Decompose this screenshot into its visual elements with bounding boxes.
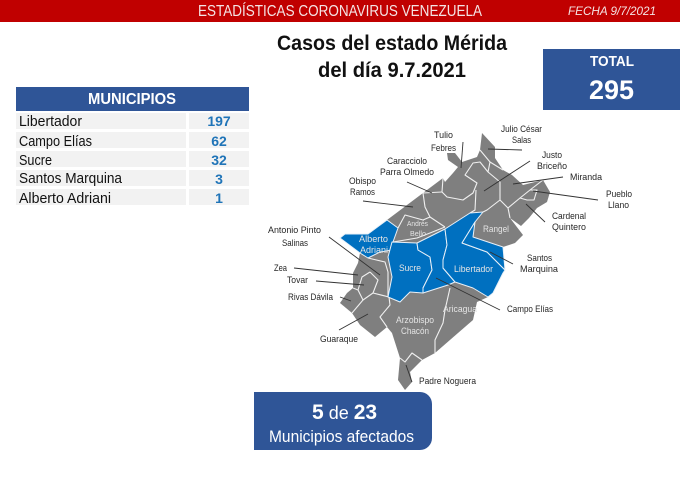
labels inside map: Chacón xyxy=(401,326,429,336)
callout: municipios afectados: 5 de 23 xyxy=(312,401,377,424)
header bar xyxy=(0,0,680,22)
panel: municipios table: 62 xyxy=(211,133,227,149)
labels inside map: Libertador xyxy=(454,264,493,274)
municipality labels: Santos xyxy=(527,253,552,263)
municipality labels: Zea xyxy=(274,263,288,273)
labels inside map: Sucre xyxy=(399,263,421,273)
municipality labels: Llano xyxy=(608,200,629,210)
panel: municipios table: Libertador xyxy=(19,114,82,130)
municipality labels: Obispo xyxy=(349,176,376,186)
municipality labels: Antonio Pinto xyxy=(268,225,321,235)
callout: municipios afectados xyxy=(254,392,432,450)
labels inside map: Bello xyxy=(410,229,426,238)
municipality labels: Miranda xyxy=(570,172,603,182)
labels inside map xyxy=(359,219,509,336)
panel: municipios table xyxy=(16,87,249,207)
municipality boundaries xyxy=(352,150,543,362)
labels inside map: Aricagua xyxy=(443,304,478,314)
header bar: FECHA 9/7/2021 xyxy=(568,4,656,18)
municipality labels: Padre Noguera xyxy=(419,376,477,386)
municipality labels: Ramos xyxy=(350,187,375,197)
municipality labels: Campo Elías xyxy=(507,304,553,314)
map of Mérida xyxy=(268,124,632,390)
callout: municipios afectados: Municipios afectados xyxy=(269,427,414,446)
municipality labels: Febres xyxy=(431,143,456,153)
title xyxy=(277,32,507,82)
total box: TOTAL xyxy=(590,53,634,70)
grey state base xyxy=(340,133,550,390)
labels inside map: Alberto xyxy=(359,234,388,244)
labels inside map: Arzobispo xyxy=(396,315,434,325)
municipality labels: Salinas xyxy=(282,238,308,248)
panel: municipios table: 3 xyxy=(215,171,223,187)
title: del día 9.7.2021 xyxy=(318,59,466,82)
municipality labels: Guaraque xyxy=(320,334,358,344)
panel: municipios table: 1 xyxy=(215,190,223,206)
panel: municipios table: MUNICIPIOS xyxy=(88,91,176,108)
municipality labels xyxy=(268,124,632,386)
municipality labels: Julio César xyxy=(501,124,542,134)
panel: municipios table: Alberto Adriani xyxy=(19,191,111,207)
municipality labels: Quintero xyxy=(552,222,586,232)
municipality labels: Pueblo xyxy=(606,189,632,199)
affected municipalities xyxy=(340,220,398,258)
labels inside map: Andrés xyxy=(407,219,428,228)
total box xyxy=(543,49,680,110)
labels inside map: Adriani xyxy=(360,245,388,255)
municipality labels: Cardenal xyxy=(552,211,586,221)
municipality labels: Parra Olmedo xyxy=(380,167,434,177)
municipality labels: Marquina xyxy=(520,264,559,274)
panel: municipios table: Sucre xyxy=(19,153,52,169)
municipality labels: Salas xyxy=(512,135,531,145)
title: Casos del estado Mérida xyxy=(277,32,507,55)
municipality labels: Justo xyxy=(542,150,562,160)
panel: municipios table: Santos Marquina xyxy=(19,171,123,187)
panel: municipios table: Campo Elías xyxy=(19,134,92,150)
municipality labels: Tulio xyxy=(434,130,453,140)
labels inside map: Rangel xyxy=(483,224,509,234)
panel: municipios table: 197 xyxy=(207,113,231,129)
leader lines xyxy=(294,142,598,382)
panel: municipios table: 32 xyxy=(211,152,227,168)
header bar: ESTADÍSTICAS CORONAVIRUS VENEZUELA xyxy=(198,3,483,20)
municipality labels: Caracciolo xyxy=(387,156,427,166)
total box: 295 xyxy=(589,75,634,105)
municipality labels: Rivas Dávila xyxy=(288,292,334,302)
municipality labels: Tovar xyxy=(287,275,308,285)
municipality labels: Briceño xyxy=(537,161,567,171)
